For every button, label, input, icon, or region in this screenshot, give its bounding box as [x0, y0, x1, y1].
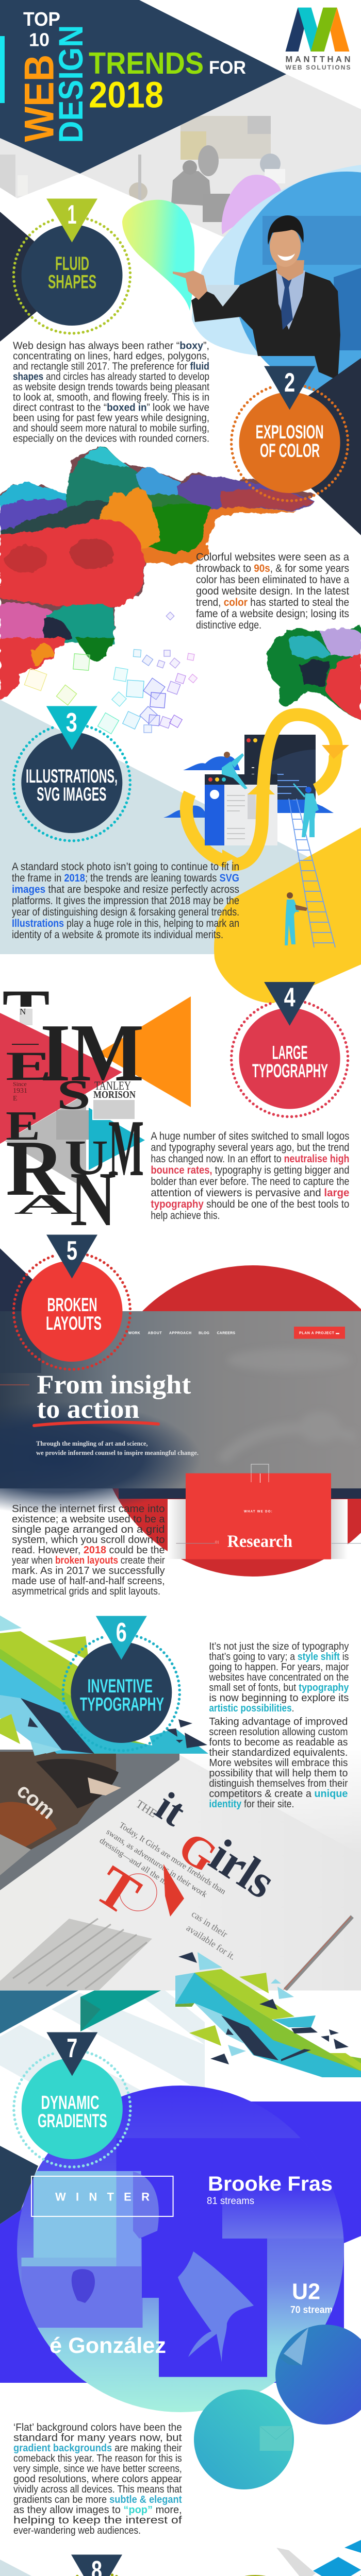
- navy title shape: [0, 0, 286, 174]
- magazine photo: dressing—and all the more: [98, 1836, 177, 1892]
- text block: fluid shapes: direct contrast to the “boxed in” look we have: [13, 402, 209, 413]
- screenshot: broken layout website: From insight: [37, 1370, 191, 1400]
- blue fluid shape with poster wall: [207, 172, 361, 396]
- gradient collage: music app: [0, 2086, 361, 2412]
- text block: inventive typography: Taking advantage of improved: [209, 1716, 348, 1727]
- text block: dynamic gradients: comeback this year. The reason for this is: [13, 2453, 182, 2464]
- screenshot: broken layout website: Through the mingling of art and science,: [36, 1439, 148, 1447]
- text block: explosion of color: distinctive edge.: [196, 619, 261, 631]
- badge 8: mobile first: [39, 2554, 155, 2576]
- screenshot: broken layout website: BLOG: [199, 1331, 210, 1335]
- badge 3: illustrations, svg images: [13, 706, 130, 841]
- large typography poster art: S: [57, 1071, 91, 1118]
- magazine photo: Today, It Girls are more firebirds than: [118, 1821, 227, 1896]
- floating red card: research: Research: [227, 1532, 292, 1551]
- text block: inventive typography: is now beginning to explore its: [209, 1692, 349, 1704]
- light-blue fluid shape: [192, 165, 361, 356]
- magazine photo: irls: [201, 1828, 285, 1908]
- text block: fluid shapes: shapes and circles has already started to develop: [13, 371, 209, 382]
- title: 2018: [89, 75, 163, 115]
- teal corner shape: [80, 1991, 161, 2031]
- text block: fluid shapes: and should seem more natural to mobile surfing,: [13, 422, 209, 434]
- text block: illustrations: the frame in 2018; the trends are leaning towards SVG: [12, 872, 239, 884]
- large typography poster art: Since: [13, 1080, 27, 1088]
- large typography poster art: N: [20, 1007, 26, 1016]
- panel: trend 3 background: [0, 700, 320, 954]
- logo: Mantthan Web Solutions: WEB SOLUTIONS: [286, 64, 351, 71]
- text block: fluid shapes: and rectangle still 2017. The preference for fluid: [13, 361, 209, 372]
- badge 6: inventive typography: TYPOGRAPHY: [80, 1694, 164, 1715]
- badge 5: broken layouts: 5: [67, 1236, 77, 1266]
- panel: trend 5: [0, 1234, 361, 1597]
- badge 2: explosion of color: [232, 366, 348, 501]
- text block: inventive typography: identity for their site.: [209, 1799, 294, 1810]
- dark band: [0, 1248, 361, 1499]
- logo: Mantthan Web Solutions: MANTTHAN: [286, 55, 351, 64]
- text block: explosion of color: [196, 551, 349, 631]
- screenshot: broken layout website: ABOUT: [148, 1331, 162, 1335]
- text block: large typography: help achieve this.: [151, 1210, 220, 1222]
- magazine photo: cas in their: [190, 1909, 229, 1939]
- red circle: [97, 1265, 361, 1577]
- large typography poster art: MORISON: [93, 1089, 136, 1100]
- screenshot: broken layout website: WORK: [128, 1331, 140, 1335]
- text block: inventive typography: competitors & create a unique: [209, 1788, 348, 1800]
- floating red card: research: [168, 1473, 361, 1560]
- text block: broken layouts: existence; a website used to be a: [12, 1514, 165, 1525]
- magazine photo: com: [12, 1779, 60, 1824]
- gradient collage: music app: 70 streams: [290, 2305, 338, 2315]
- office photo background: [0, 74, 361, 237]
- title: DESIGN: [52, 25, 90, 143]
- text block: broken layouts: read. However, 2018 could be the: [12, 1545, 165, 1556]
- panel: trend 4: [0, 975, 349, 1242]
- text block: fluid shapes: [13, 340, 209, 444]
- dark blue corner: [0, 1991, 78, 2033]
- text block: inventive typography: [209, 1641, 349, 1810]
- text block: inventive typography: going to happen. For years, major: [209, 1662, 349, 1673]
- geometric shards: [175, 1952, 361, 2077]
- badge 3: illustrations, svg images: ILLUSTRATIONS,: [26, 766, 118, 787]
- text block: broken layouts: year when broken layouts create their: [12, 1555, 165, 1566]
- pink fluid shape: [222, 175, 282, 234]
- screenshot: broken layout website: CAREERS: [217, 1331, 235, 1335]
- magazine photo: G: [170, 1821, 226, 1882]
- icon: envelope gradient circle: [194, 2389, 294, 2489]
- text block: inventive typography: screen resolution allowing custom: [209, 1726, 348, 1738]
- magazine photo: available for it.: [185, 1923, 238, 1962]
- badge 7: dynamic gradients: [14, 2032, 130, 2167]
- screenshot: broken layout website: [0, 1311, 361, 1515]
- badge 4: large typography: [232, 982, 348, 1116]
- title: [17, 9, 246, 143]
- large typography poster art: A: [14, 1189, 78, 1220]
- text block: broken layouts: [12, 1503, 165, 1597]
- panel: trend 7: [0, 1952, 361, 2536]
- badge 1: fluid shapes: 1: [67, 200, 76, 230]
- text block: illustrations: A standard stock photo isn’t going to continue to fit in: [12, 861, 239, 873]
- text block: dynamic gradients: ever-wandering web audiences.: [13, 2525, 141, 2536]
- panel: header and trend 1: [0, 0, 361, 396]
- title: TRENDS: [89, 46, 204, 80]
- badge 6: inventive typography: INVENTIVE: [88, 1675, 153, 1697]
- text block: large typography: typography should be one of the best tools to: [151, 1198, 349, 1210]
- text block: illustrations: year of distinguishing design & forsaking general trends.: [12, 906, 239, 918]
- panel: trend 3: [12, 706, 361, 1003]
- text block: broken layouts: asymmetrical grids and split layouts.: [12, 1586, 160, 1597]
- text block: broken layouts: mark. As in 2017 we successfully: [12, 1565, 165, 1577]
- large typography poster art: [0, 991, 191, 1225]
- text block: illustrations: platforms. It gives the impression that 2018 may be the: [12, 895, 239, 907]
- text block: inventive typography: possibility that will help them to: [209, 1768, 348, 1779]
- text block: inventive typography: that’s going to vary; a style shift is: [209, 1651, 349, 1663]
- badge 6: inventive typography: [63, 1616, 179, 1751]
- large typography poster art: E: [13, 1095, 18, 1103]
- magazine photo: it: [147, 1783, 193, 1835]
- isometric phone tiles: [276, 2540, 361, 2576]
- svg illustration: windows, arrows, people, ladder: [163, 715, 349, 947]
- magazine photo: T: [85, 1854, 151, 1927]
- dark corner shape: [254, 358, 361, 535]
- magazine photo: THE: [134, 1797, 159, 1820]
- cyan accent bar: [0, 36, 5, 103]
- large typography poster art: R: [6, 1125, 65, 1212]
- icon: paper plane gradient circle: [275, 2325, 361, 2425]
- badge 6: inventive typography: 6: [116, 1618, 127, 1648]
- text block: illustrations: identity of a website & promote its individual merits.: [12, 929, 223, 941]
- panel: trend 6: [0, 1616, 361, 1991]
- gradient collage: music app: Brooke Fras: [208, 2173, 333, 2195]
- large typography poster art: M: [108, 1103, 144, 1193]
- large typography poster art: IM: [40, 1007, 144, 1098]
- man in suit pointing: [173, 215, 340, 380]
- large typography poster art: E: [6, 1044, 52, 1089]
- pale blue background: [0, 2560, 361, 2576]
- badge 7: dynamic gradients: GRADIENTS: [38, 2110, 107, 2131]
- text block: large typography: attention of viewers is pervasive and large: [151, 1187, 349, 1199]
- text block: inventive typography: artistic possibilities.: [209, 1703, 294, 1714]
- large typography poster art: T: [2, 975, 50, 1054]
- floating red card: research: 01: [215, 1540, 219, 1545]
- gradient collage: music app: U2: [292, 2279, 320, 2304]
- text block: dynamic gradients: helping to keep the interest of: [13, 2515, 182, 2526]
- text block: dynamic gradients: good resolutions, where colors appear: [13, 2473, 182, 2485]
- screenshot: broken layout website: APPROACH: [169, 1331, 191, 1335]
- text block: fluid shapes: especially on the devices with rounded corners.: [13, 433, 209, 444]
- panel: trend 2: [196, 358, 361, 631]
- text block: illustrations: Illustrations play a huge role in this, helping to mark an: [12, 918, 239, 929]
- color explosion paint: [0, 446, 361, 720]
- text block: broken layouts: Since the internet first came into: [12, 1503, 165, 1515]
- badge 7: dynamic gradients: 7: [67, 2033, 77, 2063]
- text block: dynamic gradients: vividly across all devices. This means that: [13, 2484, 182, 2495]
- gradient fluid shape: [122, 200, 194, 311]
- screenshot: broken layout website: we provide informed counsel to inspire meaningful change.: [36, 1449, 199, 1456]
- text block: dynamic gradients: ‘Flat’ background colors have been the: [13, 2422, 182, 2433]
- text block: dynamic gradients: [13, 2422, 182, 2536]
- logo: Mantthan Web Solutions: [286, 8, 351, 71]
- text block: explosion of color: trend, color has started to steal the: [196, 597, 349, 608]
- title: TOP: [23, 9, 60, 30]
- title: 10: [29, 29, 50, 50]
- text block: explosion of color: good website design. In the latest: [196, 585, 349, 597]
- text block: fluid shapes: been using for past few years while designing,: [13, 412, 209, 423]
- panel: trend 8: [0, 2540, 361, 2576]
- badge 4: large typography: 4: [284, 983, 296, 1013]
- text block: illustrations: images that are bespoke and resize perfectly across: [12, 884, 239, 895]
- badge 2: explosion of color: OF COLOR: [260, 440, 320, 461]
- badge 5: broken layouts: LAYOUTS: [46, 1313, 102, 1334]
- large typography poster art: TANLEY: [94, 1079, 131, 1092]
- screenshot: broken layout website: PLAN A PROJECT ▬: [299, 1331, 339, 1335]
- gradient collage: music app: WINTER: [55, 2191, 150, 2204]
- text block: explosion of color: Colorful websites were seen as a: [196, 551, 349, 563]
- floating red card: research: WHAT WE DO:: [244, 1511, 272, 1514]
- text block: inventive typography: small set of fonts, but typography: [209, 1682, 349, 1693]
- text block: large typography: has changed now. In an effort to neutralise high: [151, 1153, 349, 1165]
- badge 1: fluid shapes: SHAPES: [48, 271, 96, 293]
- text block: inventive typography: distinguish themselves from their: [209, 1778, 348, 1789]
- text block: inventive typography: More websites will embrace this: [209, 1757, 348, 1769]
- text block: dynamic gradients: gradient backgrounds are making their: [13, 2443, 182, 2454]
- title: WEB: [17, 55, 63, 142]
- text block: fluid shapes: concentrating on lines, hard edges, polygons,: [13, 350, 209, 362]
- magazine photo: swans, as adventurous in their work: [105, 1827, 208, 1899]
- geometric shards: [0, 1616, 208, 1756]
- floating squares: [24, 612, 197, 734]
- dark navy shape: [0, 2146, 38, 2224]
- text block: broken layouts: single page arranged on a grid: [12, 1524, 165, 1535]
- text block: dynamic gradients: standard for many years now, but: [13, 2432, 182, 2444]
- large typography poster art: 1931: [13, 1087, 27, 1095]
- badge 1: fluid shapes: FLUID: [55, 253, 89, 274]
- large typography poster art: N: [70, 1156, 116, 1242]
- text block: fluid shapes: as website design trends towards being pleasant: [13, 381, 209, 393]
- text block: dynamic gradients: as they allow images to “pop” more,: [13, 2504, 182, 2516]
- text block: broken layouts: made use of half-and-half screens,: [12, 1575, 165, 1587]
- text block: broken layouts: system, which you scroll down to: [12, 1534, 165, 1546]
- badge 5: broken layouts: [14, 1234, 130, 1369]
- yellow shape: [214, 827, 361, 1003]
- text block: inventive typography: fonts to become as readable as: [209, 1737, 348, 1748]
- badge 7: dynamic gradients: DYNAMIC: [41, 2092, 100, 2113]
- dark corner shape: [0, 212, 77, 342]
- badge 3: illustrations, svg images: 3: [66, 708, 77, 738]
- pale diagonal stripes: [0, 1991, 205, 2117]
- text block: explosion of color: fame of a website design; losing its: [196, 608, 349, 620]
- badge 4: large typography: LARGE: [272, 1042, 308, 1063]
- text block: illustrations: [12, 861, 239, 941]
- badge 3: illustrations, svg images: SVG IMAGES: [37, 784, 106, 805]
- badge 2: explosion of color: 2: [284, 368, 295, 398]
- text block: explosion of color: throwback to 90s, & for some years: [196, 563, 349, 574]
- gradient collage: music app: é González: [50, 2333, 166, 2358]
- badge 1: fluid shapes: [14, 199, 130, 333]
- text block: fluid shapes: Web design has always been rather “boxy”,: [13, 340, 209, 351]
- magazine photo: [0, 1750, 361, 1991]
- title: FOR: [209, 58, 246, 78]
- text block: large typography: [151, 1130, 349, 1222]
- text block: dynamic gradients: very simple, since we have better screens,: [13, 2463, 182, 2475]
- text block: inventive typography: their standardized equivalents.: [209, 1747, 348, 1758]
- text block: inventive typography: It’s not just the size of typography: [209, 1641, 349, 1652]
- gradient collage: music app: 81 streams: [207, 2196, 254, 2207]
- large typography poster art: U: [64, 1130, 108, 1185]
- screenshot: broken layout website: to action: [37, 1395, 139, 1424]
- text block: fluid shapes: to look at, smooth, and flowing freely. This is in: [13, 392, 209, 403]
- large typography poster art: E: [6, 1104, 40, 1149]
- badge 5: broken layouts: BROKEN: [47, 1294, 97, 1315]
- text block: dynamic gradients: gradients can be more subtle & elegant: [13, 2494, 182, 2505]
